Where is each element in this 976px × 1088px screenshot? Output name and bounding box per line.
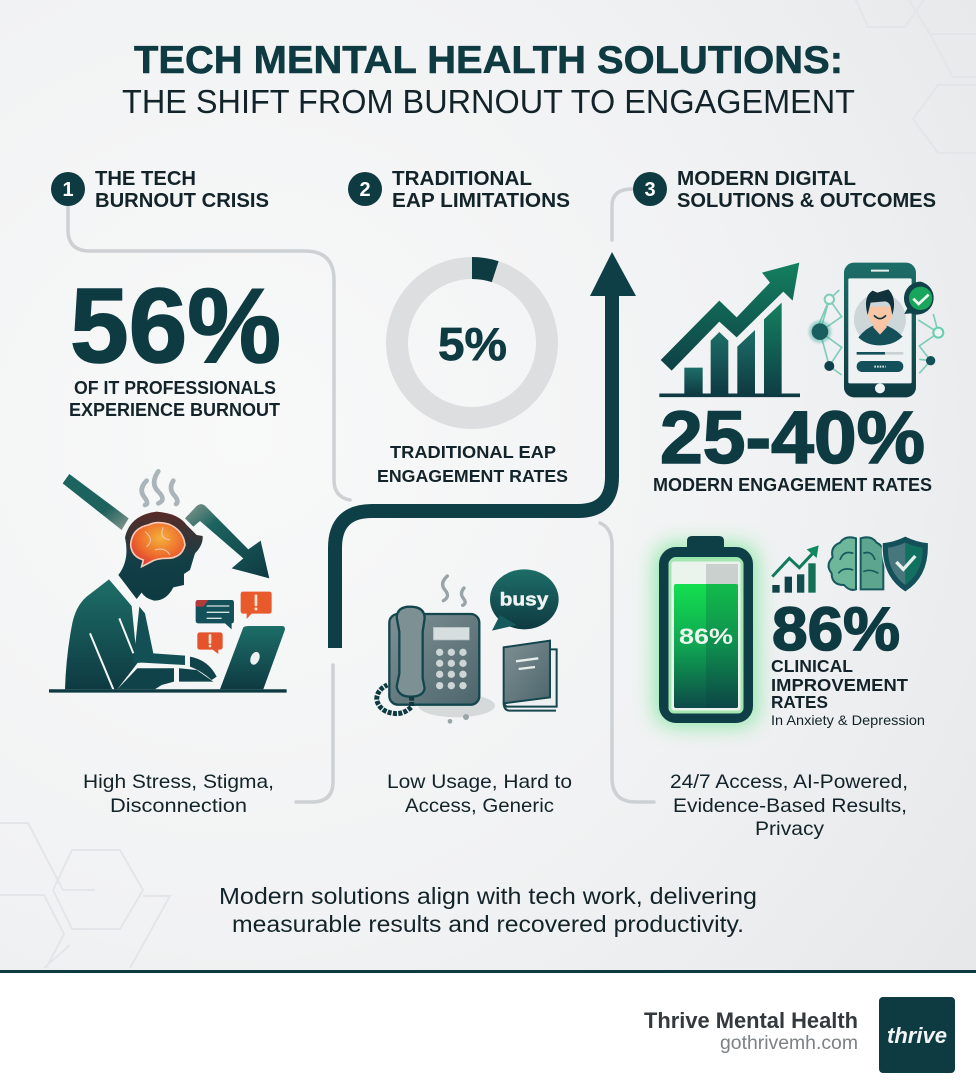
stat: clinical improvement: In Anxiety & Depression — [771, 712, 925, 728]
stat: 56 percent burnout: 56% — [70, 267, 281, 385]
title: THE SHIFT FROM BURNOUT TO ENGAGEMENT — [122, 84, 855, 121]
heading: step 2 — [348, 168, 570, 212]
text: step 2 summary: Low Usage, Hard to — [387, 771, 572, 793]
conclusion text: measurable results and recovered productivity. — [232, 911, 744, 937]
stat: clinical improvement: CLINICAL — [771, 656, 853, 676]
chart: 5 percent donut: 5% — [438, 318, 507, 370]
icon: battery at 86 percent — [656, 536, 756, 725]
heading: step 3: SOLUTIONS & OUTCOMES — [677, 190, 936, 212]
brand name: gothrivemh.com — [720, 1033, 858, 1054]
heading: step 1 — [51, 168, 269, 212]
text: step 1 summary: Disconnection — [110, 795, 247, 817]
brand name — [644, 1008, 858, 1054]
heading: step 3: 3 — [644, 179, 656, 201]
heading: step 3 — [633, 168, 936, 212]
icon: busy phone and manual — [377, 569, 559, 724]
stat: modern engagement: 25-40% — [660, 396, 925, 479]
title: TECH MENTAL HEALTH SOLUTIONS: — [134, 39, 843, 82]
brand name: Thrive Mental Health — [644, 1008, 858, 1033]
text: step 3 summary: Privacy — [755, 818, 824, 840]
connector lines — [68, 189, 654, 802]
stat: 56 percent burnout: EXPERIENCE BURNOUT — [69, 400, 280, 420]
heading: step 1: THE TECH — [95, 168, 196, 190]
caption: EAP engagement: ENGAGEMENT RATES — [377, 466, 568, 486]
text: step 3 summary — [670, 771, 908, 840]
title — [122, 39, 855, 121]
text: step 1 summary: High Stress, Stigma, — [83, 771, 274, 793]
icon: growth chart — [659, 263, 800, 395]
icon: phone with therapist avatar — [809, 263, 943, 397]
icon: burned out worker at laptop — [49, 471, 287, 691]
icon: battery at 86 percent: 86% — [679, 624, 733, 649]
chart: 5 percent donut — [397, 268, 547, 418]
stat: clinical improvement: 86% — [772, 595, 900, 663]
caption: EAP engagement: TRADITIONAL EAP — [390, 442, 556, 462]
stat: clinical improvement: RATES — [771, 692, 828, 712]
logo — [879, 997, 955, 1073]
text: step 1 summary — [83, 771, 274, 817]
stat: 56 percent burnout: OF IT PROFESSIONALS — [74, 378, 276, 398]
text: step 3 summary: Evidence-Based Results, — [673, 795, 907, 817]
conclusion text — [219, 883, 757, 937]
main upward arrow — [335, 252, 636, 648]
heading: step 2: TRADITIONAL — [392, 168, 532, 190]
caption: EAP engagement — [377, 442, 568, 486]
heading: step 1: BURNOUT CRISIS — [95, 190, 269, 212]
stat: clinical improvement — [771, 595, 925, 728]
heading: step 1: 1 — [62, 179, 74, 201]
footer band — [0, 970, 976, 1088]
conclusion text: Modern solutions align with tech work, delivering — [219, 883, 757, 909]
heading: step 2: EAP LIMITATIONS — [392, 190, 570, 212]
text: step 2 summary — [387, 771, 572, 817]
text: step 3 summary: 24/7 Access, AI-Powered, — [670, 771, 908, 793]
icon: busy phone and manual: busy — [500, 588, 549, 609]
logo: thrive — [887, 1023, 947, 1048]
icons: mini chart, brain and shield — [772, 536, 928, 593]
heading: step 2: 2 — [359, 179, 371, 201]
text: step 2 summary: Access, Generic — [405, 795, 554, 817]
heading: step 3: MODERN DIGITAL — [677, 168, 856, 190]
stat: clinical improvement: IMPROVEMENT — [771, 675, 908, 695]
stat: modern engagement: MODERN ENGAGEMENT RATES — [653, 475, 932, 495]
